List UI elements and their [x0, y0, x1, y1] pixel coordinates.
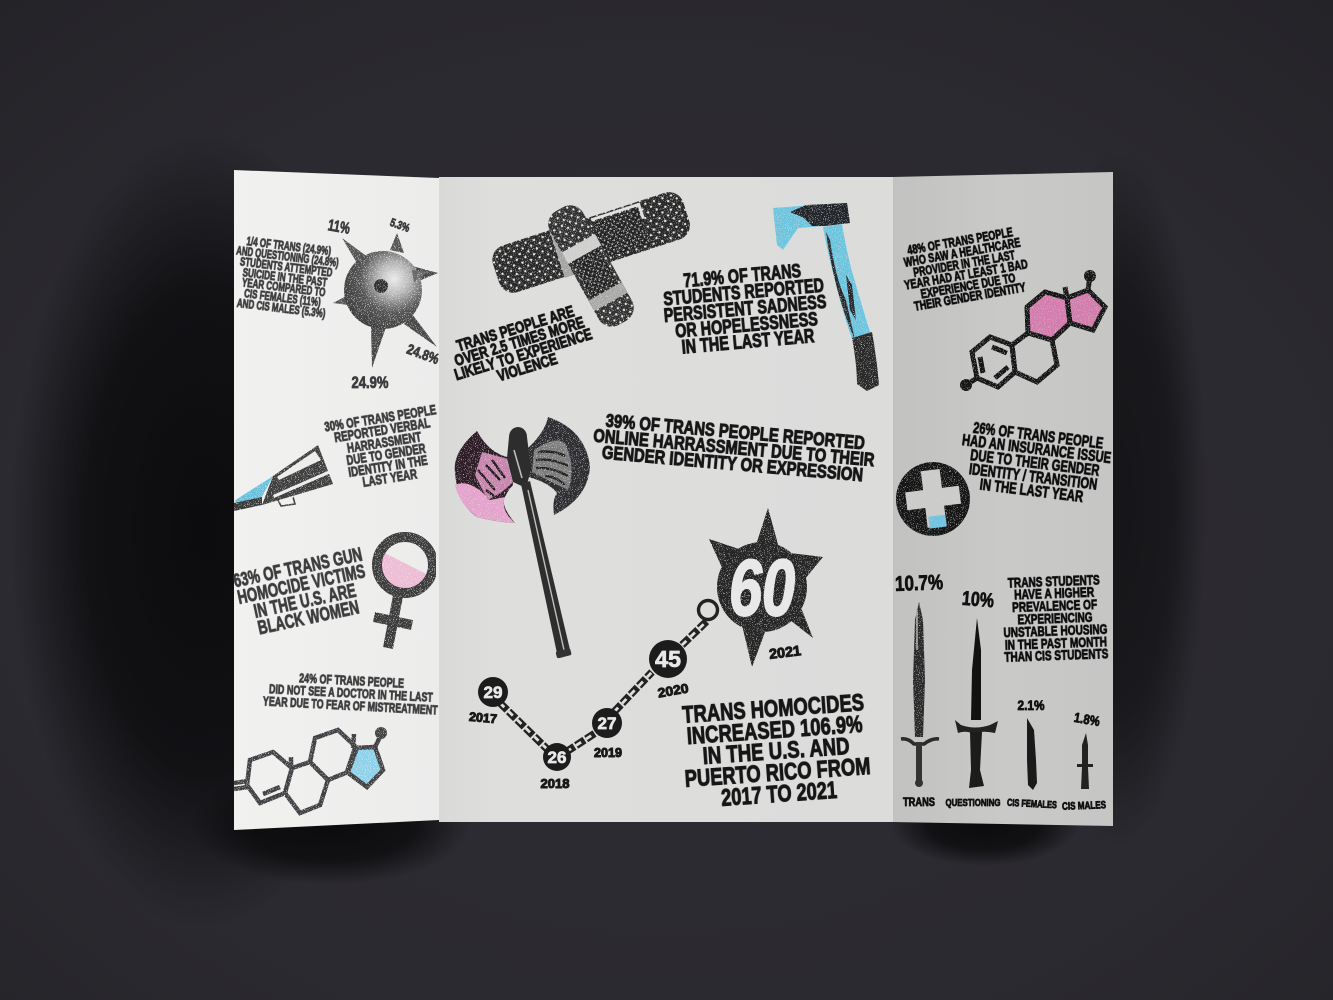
- text: homicides stat: [679, 689, 873, 814]
- percent labels: 5.3%: [388, 217, 411, 235]
- text: housing stat: THAN CIS STUDENTS: [1004, 645, 1109, 665]
- text: suicide stat: CIS FEMALES (11%): [243, 286, 322, 309]
- text: healthcare experience stat: THEIR GENDER IDENTITY: [913, 280, 1027, 314]
- point 2017: 29: 29: [484, 683, 502, 702]
- text: verbal harassment stat: REPORTED VERBAL: [333, 415, 431, 445]
- text: homicides stat: PUERTO RICO FROM: [684, 753, 871, 793]
- text: gun homicide stat: [232, 544, 375, 642]
- text: insurance stat: DUE TO THEIR GENDER: [969, 447, 1100, 480]
- text: violence stat: VIOLENCE: [495, 351, 560, 385]
- text: insurance stat: IN THE LAST YEAR: [979, 476, 1084, 506]
- text: insurance stat: [956, 418, 1114, 509]
- text: insurance stat: IDENTITY / TRANSITION: [968, 461, 1098, 494]
- text: verbal harassment stat: 30% OF TRANS PEOPLE: [323, 402, 437, 435]
- percent labels: 24.9%: [352, 373, 388, 392]
- icon: megaphone: [234, 445, 333, 511]
- text: violence stat: [445, 300, 598, 397]
- text: online harassment stat: ONLINE HARRASSMENT DUE TO THEIR: [593, 425, 875, 470]
- percent labels: 24.8%: [404, 342, 441, 368]
- text: gun homicide stat: BLACK WOMEN: [256, 596, 361, 639]
- point 2021: spiked ball 60: 60: [729, 543, 795, 632]
- point 2017: 29: [478, 677, 508, 707]
- text: housing stat: EXPERIENCING: [1017, 609, 1093, 627]
- bar: cis males 1.8% knife: [1062, 710, 1106, 813]
- point 2019: 27: 27: [598, 714, 616, 733]
- text: gun homicide stat: IN THE U.S. ARE: [252, 580, 358, 623]
- text: housing stat: [1001, 571, 1109, 665]
- text: housing stat: TRANS STUDENTS: [1007, 571, 1100, 590]
- bar: questioning 10% sword: 10%: [961, 588, 995, 612]
- bar: cis males 1.8% knife: 1.8%: [1073, 710, 1101, 729]
- text: housing stat: HAVE A HIGHER: [1014, 584, 1094, 603]
- text: doctor avoidance stat: 24% OF TRANS PEOPLE: [299, 670, 405, 691]
- text: suicide stat: 1/4 OF TRANS (24.9%): [246, 234, 332, 258]
- year labels: [468, 642, 802, 791]
- text: sadness stat: 71.9% OF TRANS: [683, 261, 802, 292]
- text: sadness stat: PERSISTENT SADNESS: [663, 292, 827, 327]
- bar: trans 10.7% sword: TRANS: [903, 797, 935, 809]
- bar: trans 10.7% sword: [895, 571, 944, 809]
- year labels: 2018: [540, 776, 570, 791]
- text: healthcare experience stat: [897, 224, 1033, 315]
- percent labels: 11%: [327, 217, 351, 238]
- chain links: [500, 600, 718, 752]
- chart: sword bars by group: [895, 571, 1106, 813]
- panel: left flap: [229, 170, 447, 830]
- text: verbal harassment stat: HARRASSMENT: [346, 429, 423, 456]
- point 2018: 26: 26: [548, 748, 566, 767]
- text: verbal harassment stat: [323, 402, 447, 494]
- text: homicides stat: IN THE U.S. AND: [702, 733, 850, 770]
- year labels: 2021: [768, 642, 802, 662]
- year labels: 2020: [657, 680, 690, 701]
- point 2018: 26: [543, 743, 571, 771]
- text: housing stat: UNSTABLE HOUSING: [1003, 621, 1108, 640]
- text: doctor avoidance stat: DID NOT SEE A DOCTOR IN THE LAST: [269, 681, 433, 705]
- bar: cis females 2.1% knife: 2.1%: [1018, 698, 1044, 713]
- point 2020: 45: [649, 640, 687, 678]
- point 2021: spiked ball 60: [709, 508, 823, 667]
- text: housing stat: IN THE PAST MONTH: [1005, 633, 1107, 653]
- text: doctor avoidance stat: YEAR DUE TO FEAR OF MISTREATMENT: [263, 693, 438, 718]
- text: suicide stat: YEAR COMPARED TO: [241, 276, 326, 300]
- text: healthcare experience stat: WHO SAW A HEALTHCARE: [903, 236, 1021, 270]
- bar: cis males 1.8% knife: CIS MALES: [1062, 799, 1106, 813]
- icon: spiked ball: [333, 233, 438, 368]
- text: violence stat: TRANS PEOPLE ARE: [455, 303, 576, 355]
- text: insurance stat: 26% OF TRANS PEOPLE: [972, 420, 1104, 452]
- paper shadows: [10, 130, 1208, 930]
- text: homicides stat: TRANS HOMOCIDES: [681, 689, 865, 729]
- icon: medical cross circle: [896, 462, 970, 536]
- panel: right flap: [893, 172, 1114, 826]
- text: online harassment stat: 39% OF TRANS PEOPLE REPORTED: [605, 410, 866, 453]
- percent labels: [327, 217, 441, 392]
- bar: questioning 10% sword: [946, 588, 1000, 809]
- icon: crossed bandages: [488, 187, 694, 332]
- text: gun homicide stat: HOMOCIDE VICTIMS: [236, 560, 367, 609]
- text: sadness stat: STUDENTS REPORTED: [663, 276, 825, 311]
- text: suicide stat: STUDENTS ATTEMPTED: [239, 254, 333, 280]
- text: suicide stat: AND CIS MALES (5.3%): [236, 296, 326, 321]
- bar: cis females 2.1% knife: CIS FEMALES: [1007, 798, 1057, 811]
- text: homicides stat: INCREASED 106.9%: [686, 711, 863, 750]
- year labels: 2017: [468, 710, 498, 726]
- text: sadness stat: OR HOPELESSNESS: [674, 309, 819, 343]
- year labels: 2019: [594, 746, 622, 760]
- text: healthcare experience stat: PROVIDER IN THE LAST: [912, 248, 1016, 280]
- text: healthcare experience stat: YEAR HAD AT LEAST 1 BAD: [903, 257, 1029, 293]
- text: violence stat: OVER 2.5 TIMES MORE: [453, 314, 587, 370]
- text: suicide stat: [229, 233, 341, 321]
- text: suicide stat: AND QUESTIONING (24.8%): [236, 243, 339, 270]
- icon: female symbol with pink fill: [374, 537, 433, 648]
- chart: homicides chain from 2017 to 2021: [468, 508, 823, 791]
- text: homicides stat: 2017 TO 2021: [720, 777, 838, 812]
- panel: centre: [439, 177, 893, 822]
- text: insurance stat: HAD AN INSURANCE ISSUE: [961, 432, 1112, 467]
- point 2020: 45: 45: [655, 646, 681, 672]
- text: gun homicide stat: 63% OF TRANS GUN: [232, 544, 364, 592]
- bar: cis females 2.1% knife: [1007, 698, 1057, 811]
- text: housing stat: PREVALENCE OF: [1012, 596, 1098, 615]
- icon: hatchet: [773, 203, 879, 391]
- text: healthcare experience stat: 48% OF TRANS PEOPLE: [906, 225, 1014, 258]
- chart: spiked mace ball with percentages: [327, 217, 441, 392]
- bar: questioning 10% sword: QUESTIONING: [946, 797, 1000, 809]
- icon: estradiol molecule with pink rings: [960, 270, 1105, 391]
- text: healthcare experience stat: EXPERIENCE DUE TO: [920, 271, 1017, 301]
- text: verbal harassment stat: LAST YEAR: [361, 466, 418, 490]
- text: doctor avoidance stat: [263, 668, 439, 718]
- text: violence stat: LIKELY TO EXPERIENCE: [453, 326, 594, 384]
- icon: battle axe: [455, 417, 590, 659]
- text: online harassment stat: GENDER IDENTITY OR EXPRESSION: [601, 442, 864, 485]
- point 2019: 27: [592, 708, 622, 738]
- text: suicide stat: SUICIDE IN THE PAST: [242, 265, 328, 289]
- text: sadness stat: IN THE LAST YEAR: [681, 326, 815, 359]
- text: sadness stat: [660, 259, 830, 360]
- bar: trans 10.7% sword: 10.7%: [895, 571, 944, 596]
- text: online harassment stat: [591, 409, 877, 486]
- text: verbal harassment stat: DUE TO GENDER: [345, 441, 427, 468]
- icon: molecule with blue ring: [234, 727, 387, 813]
- text: verbal harassment stat: IDENTITY IN THE: [347, 453, 429, 480]
